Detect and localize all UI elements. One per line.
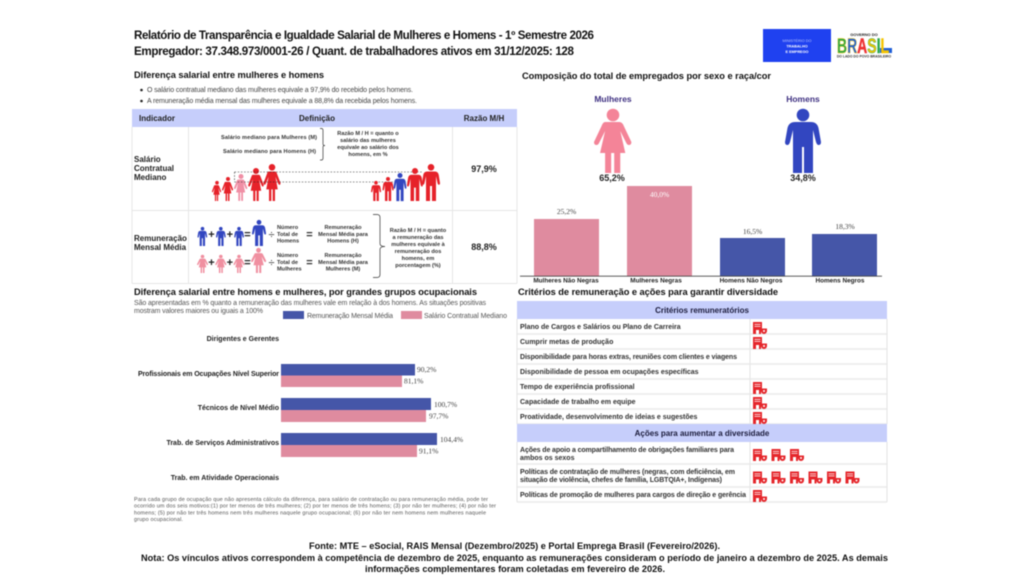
heading: critérios: Critérios de remuneração e ações para garantir diversidade — [518, 287, 778, 297]
bar chart: grupos ocupacionais: Profissionais em Ocupações Nível Superior — [138, 371, 279, 378]
list: critérios: Disponibilidade para horas extras, reuniões com clientes e viagens — [520, 354, 737, 361]
formula: homens: ÷ — [268, 229, 275, 241]
row label: Remuneração — [134, 234, 187, 243]
table header: Definição — [299, 114, 335, 123]
formula: mulheres: ÷ — [268, 257, 275, 269]
formula: homens: Homens — [277, 238, 299, 244]
title: Empregador: 37.348.973/0001-26 / Quant. de trabalhadores ativos em 31/12/2025: 128 — [134, 45, 575, 58]
icon: mulheres 65,2% — [594, 94, 632, 183]
heading: grupos ocupacionais: Diferença salarial entre homens e mulheres, por grandes grupos ocupacionais — [134, 287, 477, 297]
list: critérios: Tempo de experiência profissional — [520, 384, 635, 391]
formula: homens: + — [227, 229, 233, 241]
footer: fonte e nota: Nota: Os vínculos ativos correspondem à competência de dezembro de 2025, enquanto as remunerações consideram o período de janeiro a dezembro de 2025. As demais — [141, 553, 888, 563]
table header: Indicador — [139, 114, 175, 123]
bar chart: composição: 16,5% — [743, 227, 762, 236]
bracket and ratio definition: a remuneração das — [392, 235, 444, 241]
bar chart: grupos ocupacionais: 81,1% — [404, 376, 423, 386]
bracket and ratio definition: Razão M / H = quanto — [390, 228, 447, 234]
bracket and ratio definition: remuneração dos — [395, 249, 441, 255]
bracket and ratio definition: homens, em — [402, 256, 434, 262]
row label: Contratual — [134, 164, 174, 173]
logo: governo do brasil: GOVERNO DO — [850, 32, 878, 37]
bar chart: grupos ocupacionais: Técnicos de Nível Médio — [198, 405, 279, 412]
icons: empresa ações — [753, 449, 860, 502]
logo: ministério do trabalho e emprego: TRABALHO — [786, 44, 808, 48]
footer: fonte e nota: Fonte: MTE – eSocial, RAIS Mensal (Dezembro/2025) e Portal Emprega Brasil (Fevereiro/2026). — [309, 541, 720, 551]
logo: governo do brasil: DO LADO DO POVO BRASILEIRO — [837, 54, 891, 58]
icon: homens 34,8% — [785, 94, 821, 183]
row label: Mensal Média — [134, 243, 187, 252]
bar chart: composição: Mulheres Não Negras — [533, 278, 599, 284]
formula: mulheres: Remuneração — [324, 253, 362, 259]
icon: família de homens — [371, 164, 440, 201]
bar chart: grupos ocupacionais: 100,7% — [434, 400, 457, 409]
formula: mulheres: + — [208, 257, 215, 269]
row: salário contratual mediano — [134, 128, 497, 201]
bar chart: composição: Mulheres Negras — [630, 278, 682, 284]
heading: composição: Composição do total de empregados por sexo e raça/cor — [522, 71, 771, 81]
formula: homens: Remuneração — [324, 225, 362, 231]
table header: ações para aumentar a diversidade: Ações para aumentar a diversidade — [635, 429, 770, 438]
table header: critérios remuneratórios — [517, 301, 887, 319]
icon: mulheres 65,2%: Mulheres — [594, 94, 632, 104]
formula: homens — [198, 220, 369, 246]
legend: Salário Contratual Mediano — [424, 313, 507, 320]
icon: homens 34,8%: Homens — [786, 94, 820, 104]
bar chart: grupos ocupacionais: Dirigentes e Gerentes — [207, 336, 279, 343]
formula: homens: + — [208, 229, 215, 241]
formula: mulheres — [197, 248, 369, 273]
bracket and ratio definition — [373, 214, 447, 278]
bar chart: composição: 18,3% — [835, 222, 855, 231]
definition text: Razão M / H = quanto o — [337, 131, 399, 137]
icon: mulheres 65,2%: 65,2% — [599, 173, 625, 183]
table header: critérios remuneratórios: Critérios remuneratórios — [655, 306, 749, 315]
list: ações — [520, 447, 746, 499]
title — [134, 29, 595, 58]
row: remuneração mensal média — [134, 214, 497, 278]
list: critérios: Proatividade, desenvolvimento de ideias e sugestões — [520, 414, 698, 421]
panel: composição por sexo e raça/cor — [520, 71, 882, 284]
value: 88,8%: 88,8% — [471, 242, 497, 252]
footer: fonte e nota — [141, 541, 888, 574]
list: critérios: Disponibilidade de pessoa em ocupações específicas — [520, 369, 699, 376]
text block: explicação: mostram valores maiores ou iguais a 100% — [134, 308, 263, 315]
bracket and ratio definition: mulheres equivale à — [391, 242, 446, 248]
logo: ministério do trabalho e emprego: E EMPREGO — [786, 50, 809, 54]
bar chart: grupos ocupacionais — [138, 336, 463, 482]
text block: nota de rodapé do gráfico: Para cada grupo de ocupação que não apresenta cálculo da diferença, para salário de contratação ou para remuneração média, pode ter — [134, 497, 488, 503]
formula: homens: = — [244, 229, 251, 241]
title: Relatório de Transparência e Igualdade Salarial de Mulheres e Homens - 1º Semestre 2026 — [134, 29, 595, 42]
text block: explicação: São apresentadas em % quanto a remuneração das mulheres vale em relação à dos homens. As situações positivas — [134, 300, 486, 307]
heading: diferença salarial: Diferença salarial entre mulheres e homens — [134, 70, 324, 80]
list: ações: Ações de apoio a compartilhamento de obrigações familiares para — [520, 447, 734, 454]
logo: governo do brasil: BRASIL — [837, 35, 889, 58]
formula: mulheres: Mensal Média para — [318, 260, 369, 266]
definition text: equivale ao salário dos — [337, 145, 399, 151]
list: critérios: Plano de Cargos e Salários ou Plano de Carreira — [520, 324, 681, 331]
definition text: Salário mediano para Mulheres (M) — [221, 135, 317, 141]
definition text: homens, em % — [348, 152, 388, 158]
definition text: salário das mulheres — [340, 138, 396, 144]
list: critérios: Cumprir metas de produção — [520, 339, 613, 346]
formula: mulheres: + — [227, 257, 233, 269]
list: ações: Políticas de contratação de mulheres (negras, com deficiência, em — [520, 469, 735, 476]
bar chart: composição: Homens Negros — [815, 278, 865, 284]
formula: homens: Homens (H) — [327, 238, 359, 244]
text block: nota de rodapé do gráfico: ocorrido um dos seis motivos:(1) por ter menos de três mulheres; (2) por ter menos de três homens; (3) por não ter mulheres; (4) por não ter — [134, 504, 496, 510]
formula: homens: Mensal Média para — [318, 232, 369, 238]
logo: ministério do trabalho e emprego — [763, 29, 831, 62]
formula: mulheres: Mulheres — [277, 266, 302, 272]
legend — [283, 311, 507, 320]
formula: homens: Total de — [277, 232, 298, 238]
text block: destaques: O salário contratual mediano das mulheres equivale a 97,9% do recebido pelos homens. — [147, 87, 413, 94]
formula: mulheres: Número — [277, 253, 299, 259]
formula: mulheres: Total de — [277, 260, 298, 266]
bar chart: composição — [520, 186, 882, 284]
table header: ações para aumentar a diversidade — [517, 424, 887, 442]
value: 97,9%: 97,9% — [471, 164, 497, 174]
formula: mulheres: = — [244, 257, 251, 269]
panel: diferença por grupos ocupacionais — [134, 287, 507, 523]
text block: destaques — [140, 87, 417, 105]
bar chart: composição: Homens Não Negros — [720, 278, 783, 284]
bracket and ratio definition: porcentagem (%) — [395, 263, 441, 269]
formula: mulheres: = — [306, 257, 313, 269]
bar chart: composição: 40,0% — [650, 190, 669, 199]
table header: Razão M/H — [464, 114, 504, 123]
bar chart: grupos ocupacionais: Trab. de Serviços Administrativos — [166, 440, 279, 447]
panel: diferença salarial entre mulheres e homens — [132, 70, 517, 284]
bar chart: grupos ocupacionais: 104,4% — [440, 435, 463, 444]
text block: nota de rodapé do gráfico: grupo ocupacional. — [134, 517, 183, 523]
definition text — [221, 128, 399, 160]
list: ações: Políticas de promoção de mulheres para cargos de direção e gerência — [520, 492, 746, 499]
formula: homens: = — [306, 229, 313, 241]
text block: nota de rodapé do gráfico: homens; (5) por não ter três homens nem três mulheres naquele grupo ocupacional; (6) por não ter nem homens nem mulheres naquele — [134, 510, 486, 516]
list: ações: ambos os sexos — [520, 455, 575, 462]
list: ações: situação de violência, chefes de família, LGBTQIA+, Indígenas) — [520, 477, 722, 484]
row label: Salário — [134, 155, 161, 164]
list: critérios — [520, 324, 737, 421]
legend: Remuneração Mensal Média — [307, 313, 393, 320]
icon: homens 34,8%: 34,8% — [790, 173, 816, 183]
bar chart: composição: 25,2% — [557, 207, 576, 216]
definition text: Salário mediano para Homens (H) — [223, 149, 316, 155]
list: critérios: Capacidade de trabalho em equipe — [520, 399, 636, 406]
text block: destaques: A remuneração média mensal das mulheres equivale a 88,8% da recebida pelos homens. — [147, 98, 417, 105]
icon: família de mulheres — [212, 164, 281, 201]
bar chart: grupos ocupacionais: 90,2% — [417, 365, 436, 374]
row label: Mediano — [134, 173, 167, 182]
bar chart: grupos ocupacionais: Trab. em Atividade Operacionais — [171, 475, 279, 482]
formula: mulheres: Mulheres (M) — [326, 266, 360, 272]
panel: critérios de remuneração e ações — [517, 287, 887, 502]
formula: homens: Número — [277, 225, 299, 231]
bar chart: grupos ocupacionais: 91,1% — [419, 446, 438, 456]
bar chart: grupos ocupacionais: 97,7% — [429, 412, 448, 420]
footer: fonte e nota: informações complementares foram coletadas em fevereiro de 2026. — [365, 564, 665, 574]
logo: ministério do trabalho e emprego: MINISTÉRIO DO — [783, 38, 811, 43]
table header — [132, 109, 517, 127]
icons: empresa critérios — [753, 322, 767, 424]
